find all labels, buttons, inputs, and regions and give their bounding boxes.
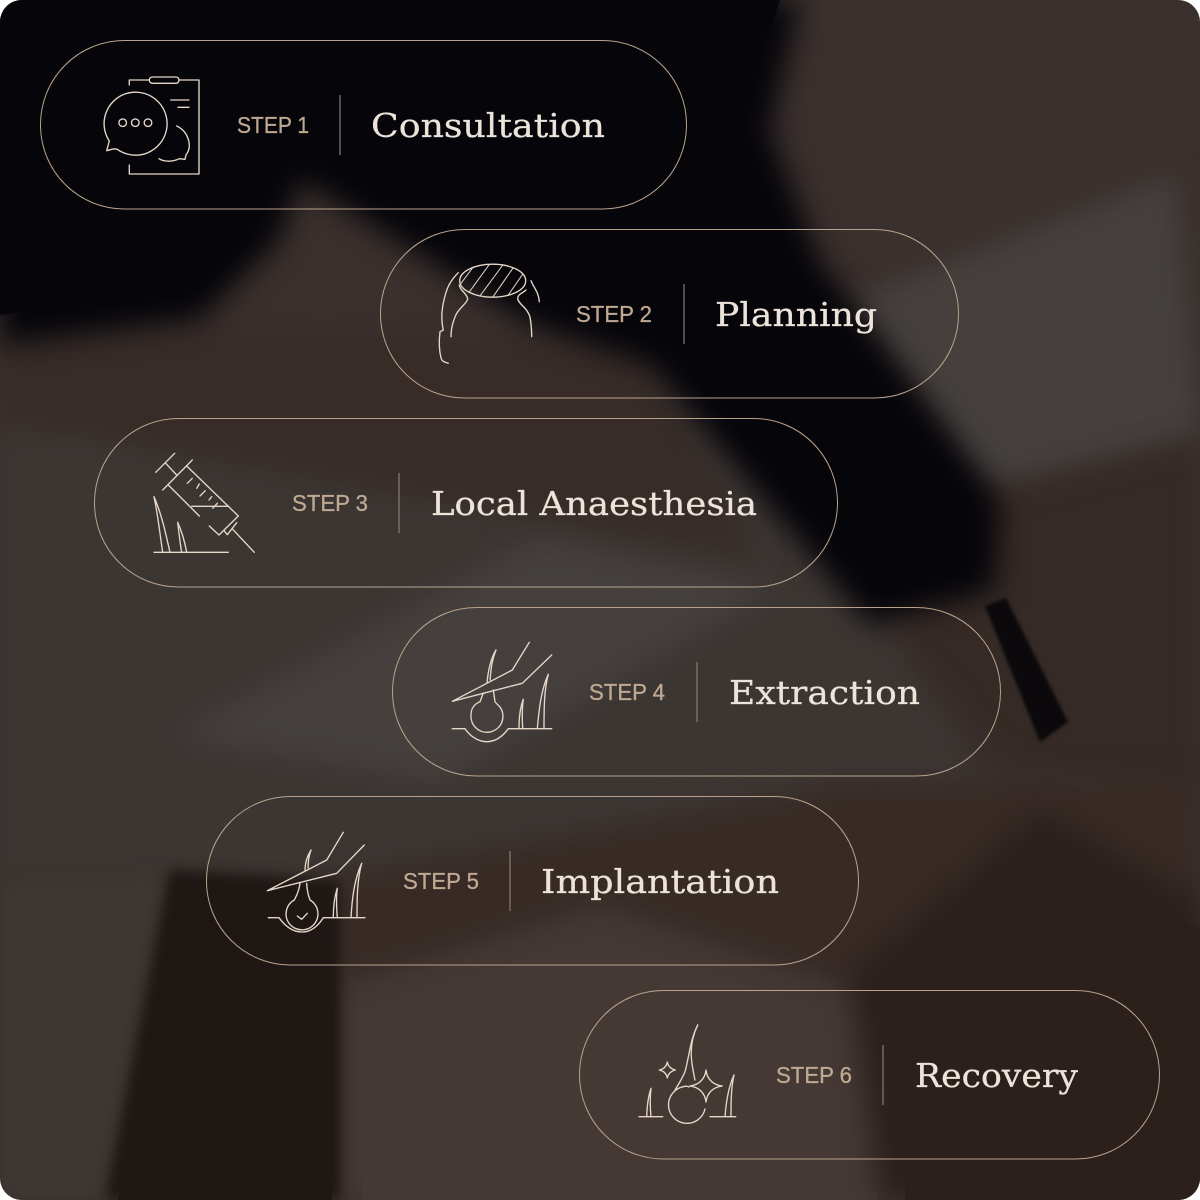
step 3 pill: Local Anaesthesia — [94, 418, 838, 587]
step label 5: STEP 5 — [403, 868, 479, 894]
icon: healthy hair with sparkles — [639, 1025, 736, 1123]
step 1 pill: Consultation — [40, 40, 686, 209]
icon: tweezers implanting follicle — [267, 832, 365, 932]
heading: Extraction: Extraction — [729, 673, 920, 712]
step label 3: STEP 3 — [292, 490, 368, 516]
step label 6: STEP 6 — [776, 1062, 852, 1088]
heading: Local Anaesthesia: Local Anaesthesia — [431, 484, 757, 523]
heading: Implantation: Implantation — [541, 862, 779, 901]
step 4 pill: Extraction — [392, 608, 1000, 776]
step 5 pill: Implantation — [206, 796, 858, 965]
heading: Recovery: Recovery — [915, 1056, 1078, 1095]
icon: tweezers extracting follicle — [452, 642, 552, 742]
step label 1: STEP 1 — [237, 112, 309, 138]
step 6 pill: Recovery — [580, 990, 1160, 1159]
heading: Consultation: Consultation — [371, 106, 605, 145]
step 2 pill: Planning — [380, 230, 958, 398]
icon: head with hatched crown — [438, 264, 540, 364]
icon: clipboard with speech bubbles — [104, 77, 199, 174]
step label 4: STEP 4 — [589, 679, 665, 705]
step label 2: STEP 2 — [576, 301, 652, 327]
heading: Planning: Planning — [715, 295, 877, 334]
icon: syringe over hair — [154, 453, 254, 552]
